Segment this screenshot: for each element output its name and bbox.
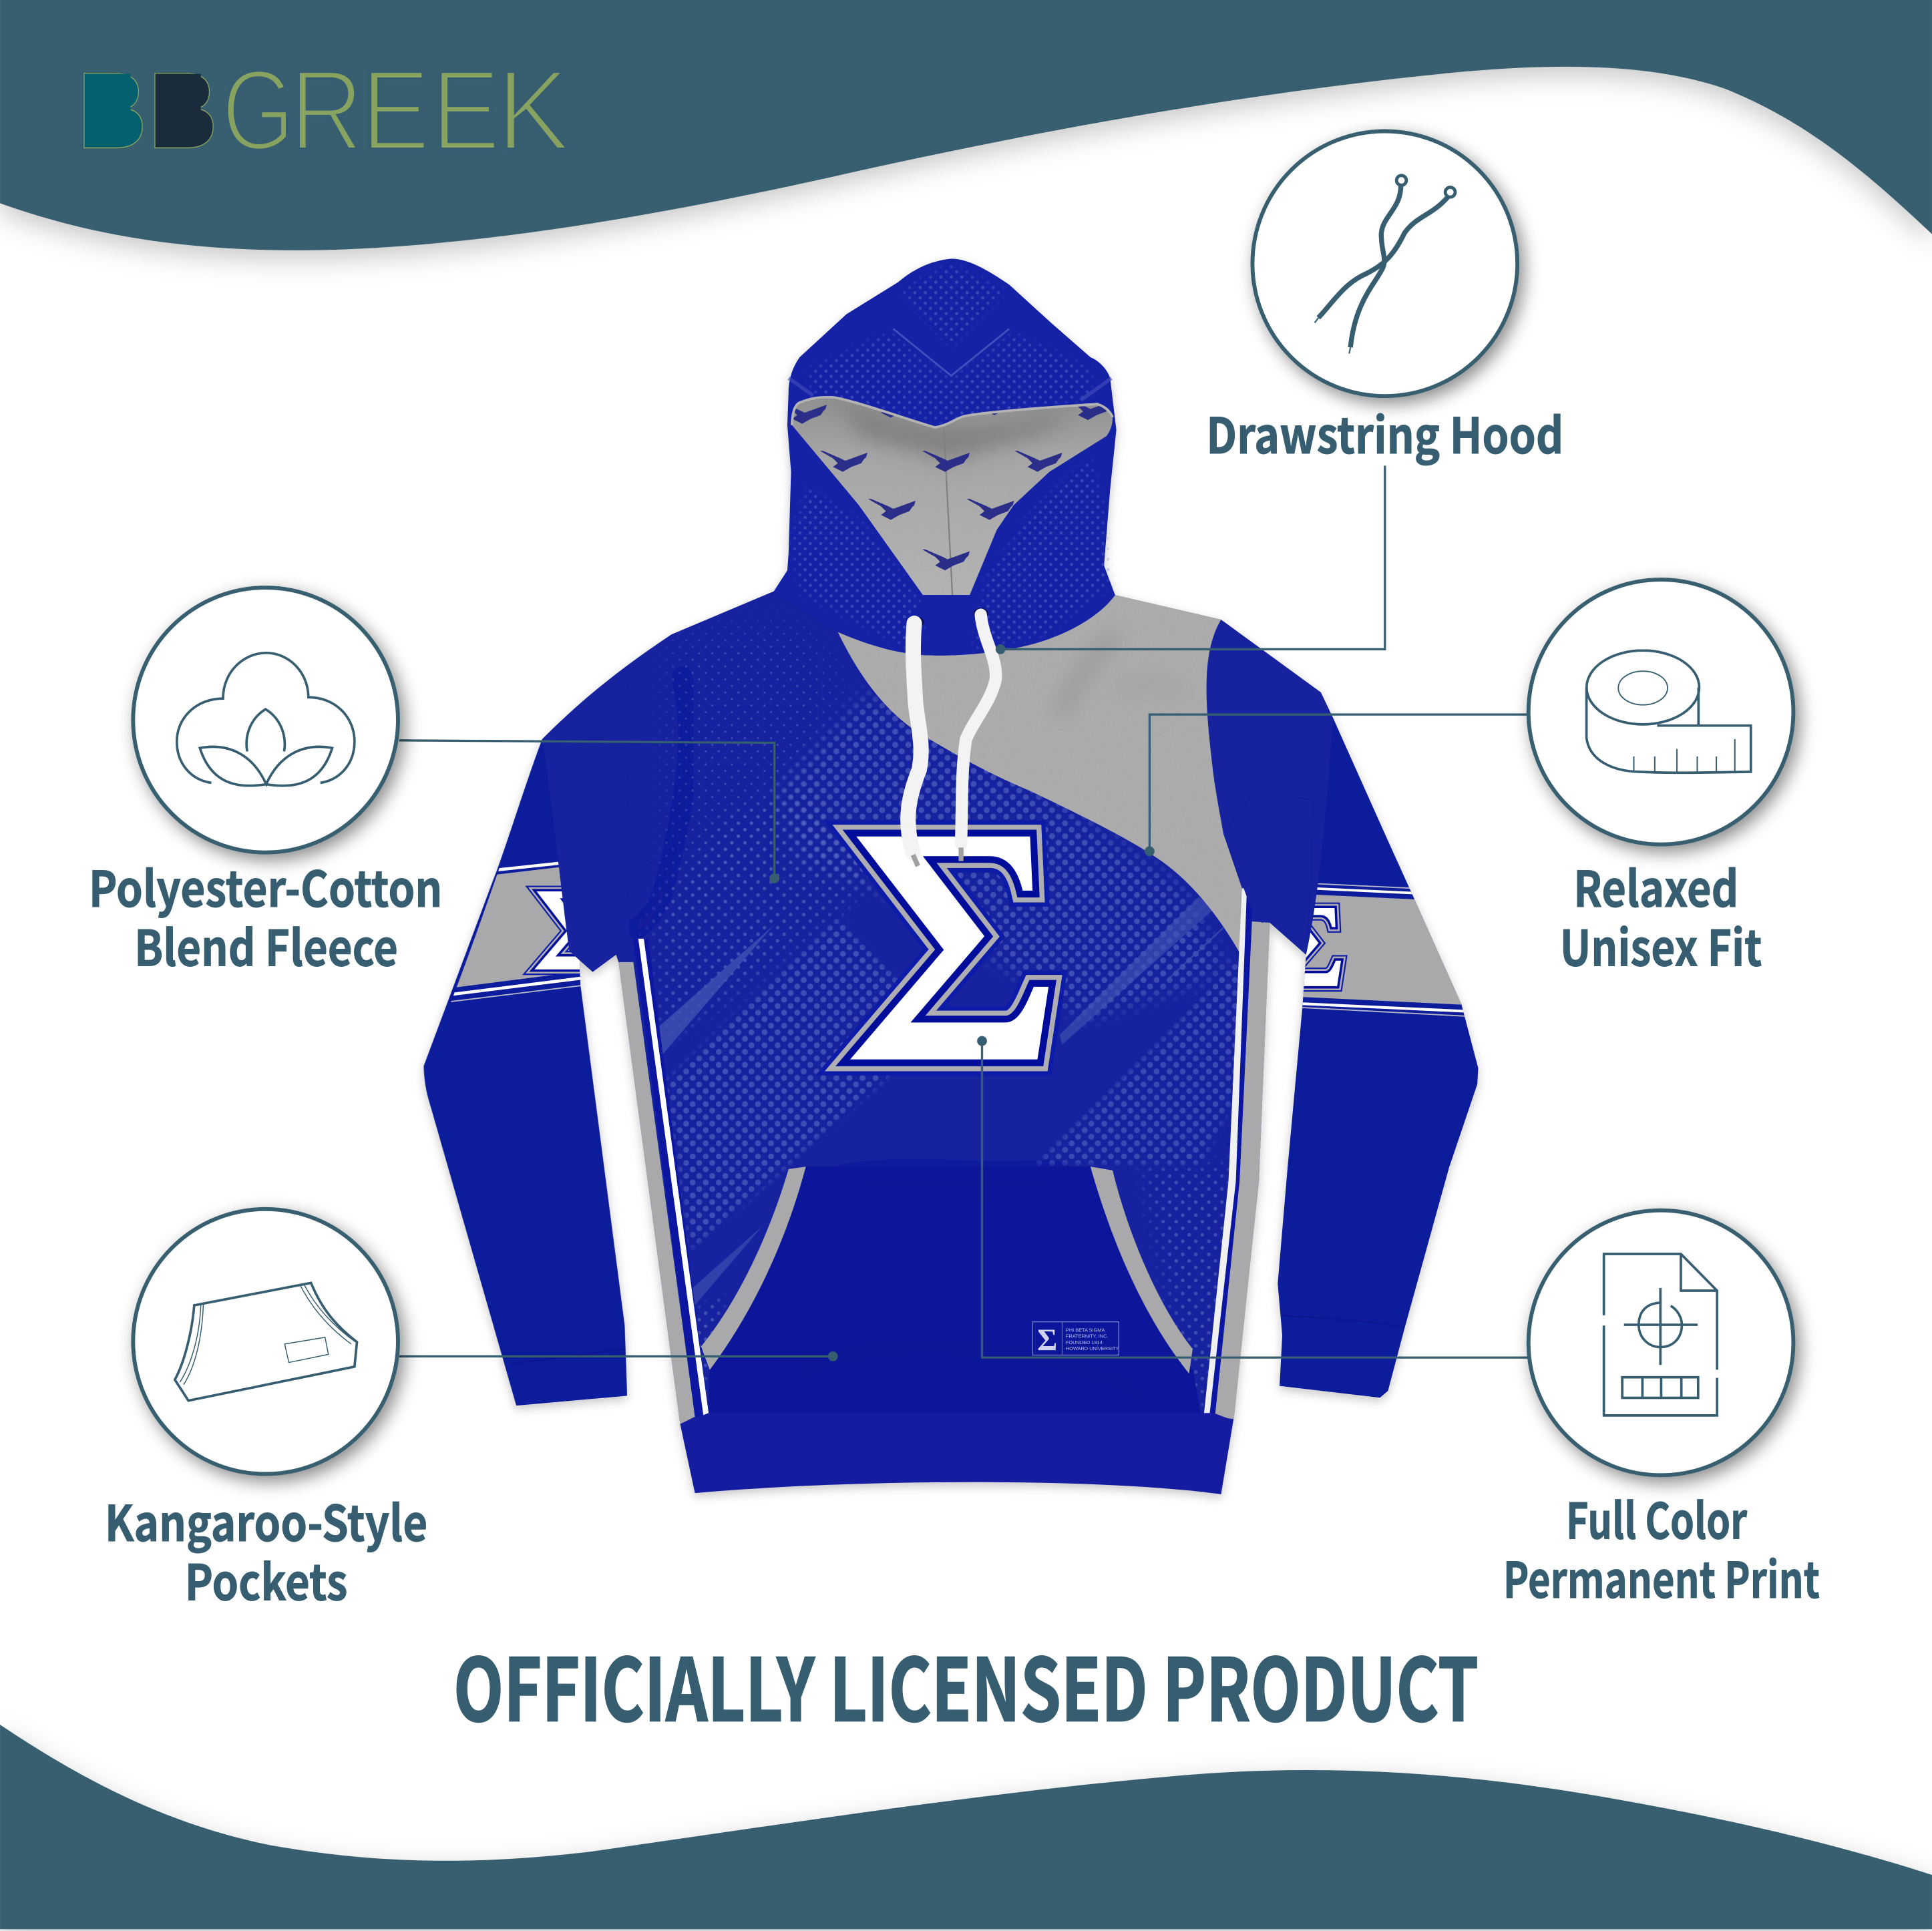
hood rim highlight xyxy=(792,397,1113,427)
circle badge xyxy=(133,1209,398,1474)
hoodie product illustration xyxy=(424,252,1478,1494)
feature: relaxed unisex fit: Unisex Fit xyxy=(1560,909,1762,980)
callout line: relaxed fit xyxy=(1145,714,1528,856)
pocket tag: FRATERNITY, INC. xyxy=(1066,1333,1108,1339)
logo: BB GREEK: E xyxy=(431,47,500,174)
feature: kangaroo-style pockets: Pockets xyxy=(185,1544,347,1615)
right pocket opening trim xyxy=(1091,1166,1193,1373)
hood seam lines xyxy=(789,329,1111,401)
logo: BB GREEK: R xyxy=(290,47,363,174)
circle badge xyxy=(133,588,398,853)
pocket tag: HOWARD UNIVERSITY xyxy=(1066,1345,1119,1351)
pocket tag: Σ xyxy=(1037,1323,1057,1357)
feature: full color permanent print: Permanent Print xyxy=(1503,1541,1820,1613)
circle badge xyxy=(1529,580,1793,845)
feature: polyester-cotton blend fleece xyxy=(89,588,442,980)
title: officially licensed product: OFFICIALLY LICENSED PRODUCT xyxy=(453,1621,1479,1746)
callout line: kangaroo pockets xyxy=(399,1351,838,1361)
bottom rib hem xyxy=(680,1413,1233,1494)
chest grey panel fold shading xyxy=(1060,634,1183,714)
header wave band xyxy=(0,0,1932,250)
left drawstring xyxy=(907,616,924,866)
logo: BB GREEK xyxy=(77,47,570,174)
icon: measuring tape xyxy=(1587,650,1751,773)
left pocket opening trim xyxy=(701,1166,806,1370)
feature: kangaroo-style pockets xyxy=(105,1209,427,1615)
chest grey panel xyxy=(838,595,1242,955)
icon: cotton boll xyxy=(177,653,355,786)
logo: BB GREEK: B xyxy=(77,50,147,171)
pocket tag: FOUNDED 1914 xyxy=(1066,1339,1103,1345)
logo: BB GREEK: B xyxy=(148,50,218,171)
callout line: drawstring hood xyxy=(996,465,1385,654)
pocket fold shading xyxy=(789,1183,1146,1398)
label: Drawstring Hood xyxy=(1206,397,1563,468)
label: Relaxed xyxy=(1573,850,1738,921)
feature: relaxed unisex fit xyxy=(1529,580,1793,980)
collar patch under lining xyxy=(914,595,976,622)
pocket tag: PHI BETA SIGMA xyxy=(1066,1327,1105,1333)
icon: pocket xyxy=(175,1283,357,1401)
icon: drawstrings xyxy=(1315,176,1455,354)
hoodie body xyxy=(542,592,1333,1424)
footer wave band xyxy=(0,1725,1932,1929)
logo: BB GREEK: E xyxy=(361,47,430,174)
feature: polyester-cotton blend fleece: Blend Fleece xyxy=(134,909,398,980)
pocket tag xyxy=(1032,1322,1119,1357)
label: Polyester-Cotton xyxy=(89,850,442,921)
kangaroo pocket xyxy=(709,1166,1201,1417)
label: Kangaroo-Style xyxy=(105,1484,427,1556)
right drawstring xyxy=(961,608,996,861)
halftone and streak pattern on body xyxy=(626,593,1240,1407)
label: Full Color xyxy=(1566,1482,1748,1553)
callout line: polyester-cotton blend xyxy=(399,740,779,883)
feature: drawstring hood xyxy=(1206,131,1563,468)
hood lining shading and bird pattern xyxy=(779,394,1113,596)
chest sigma emblem xyxy=(850,837,1048,1060)
logo: BB GREEK: K xyxy=(497,47,570,174)
right shoulder flap over stripes xyxy=(1223,789,1314,955)
circle badge xyxy=(1252,131,1517,396)
circle badge xyxy=(1529,1211,1793,1475)
icon: print document with target xyxy=(1604,1254,1717,1416)
left sleeve xyxy=(424,739,627,1406)
feature: full color permanent print xyxy=(1503,1211,1820,1613)
callout line: full color print xyxy=(977,1036,1528,1357)
hood inner lining xyxy=(792,397,1113,595)
logo: BB GREEK: G xyxy=(222,47,295,174)
hood halftone xyxy=(776,252,1127,665)
right side panel with stripes xyxy=(1204,888,1270,1419)
right sleeve xyxy=(1272,702,1478,1398)
left side panel with stripes xyxy=(618,939,709,1424)
hood xyxy=(774,252,1127,665)
